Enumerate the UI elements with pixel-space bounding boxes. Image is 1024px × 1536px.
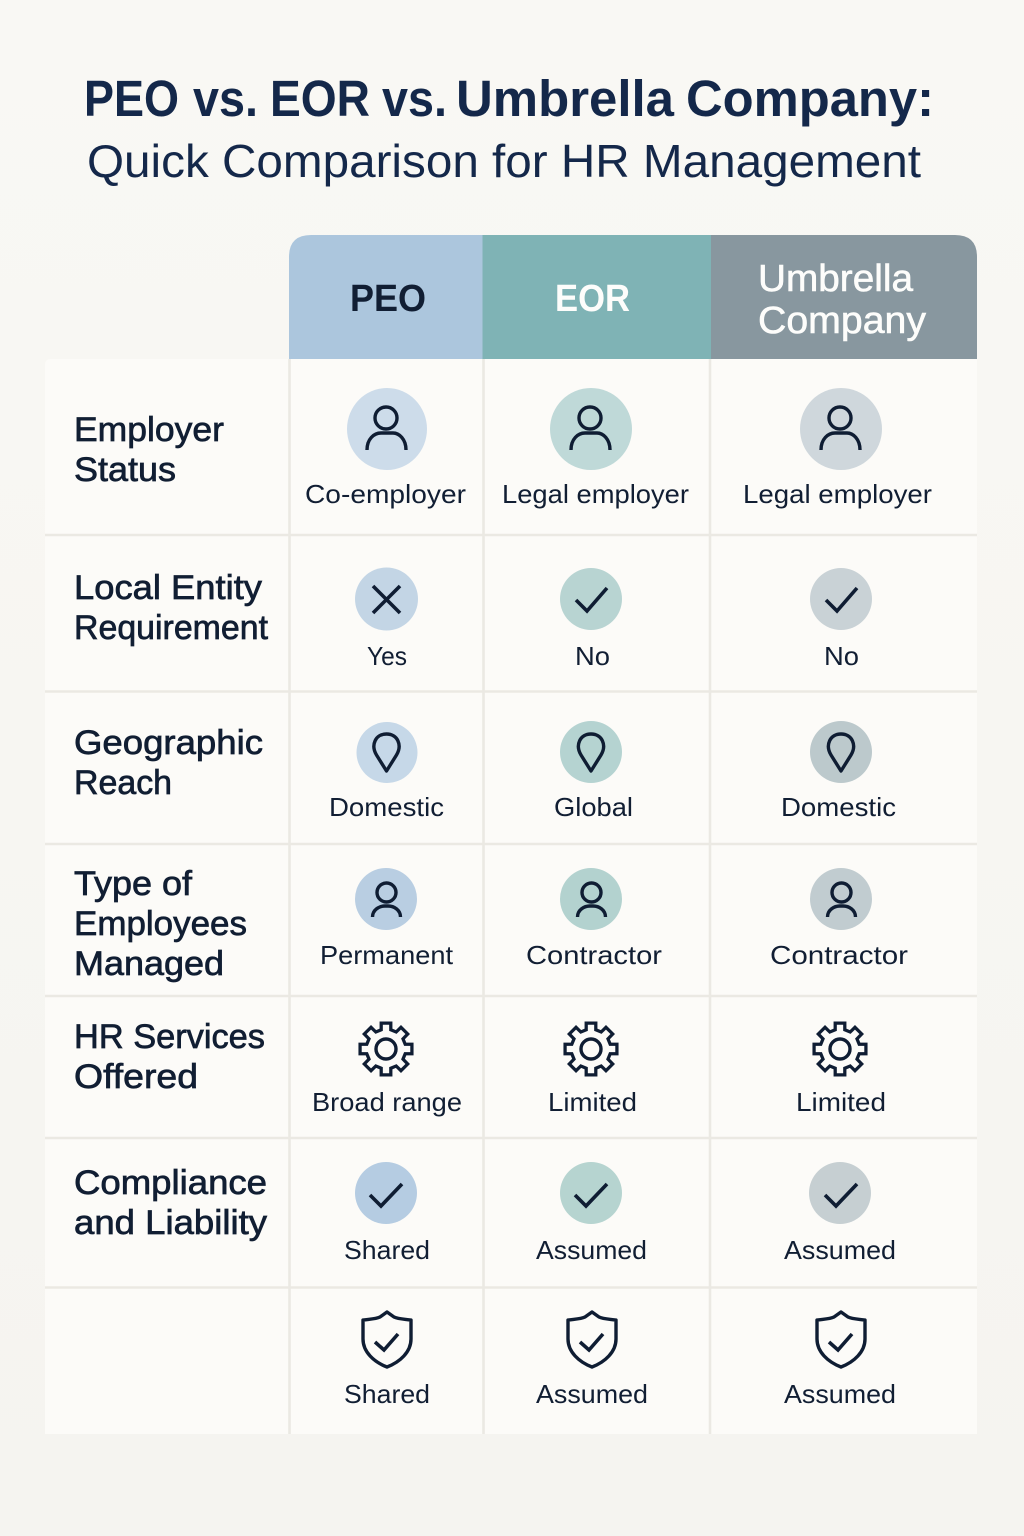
icon: shield Umbrella [817, 1312, 865, 1367]
value: Limited [796, 1087, 886, 1117]
value: Domestic [781, 792, 896, 822]
row label: Requirement [74, 609, 269, 647]
row: Compliance and Liability [74, 1162, 896, 1265]
value: Contractor [770, 940, 908, 970]
value: Legal employer [743, 479, 932, 509]
value: Permanent [320, 940, 454, 970]
row label: Compliance [74, 1164, 267, 1202]
value: Shared [344, 1235, 430, 1265]
value: Co-employer [305, 479, 466, 509]
value: Yes [367, 641, 407, 671]
title: Quick Comparison for HR Management [87, 135, 921, 187]
icon: pin EOR [560, 721, 622, 783]
row label: Status [74, 451, 176, 489]
icon: person Umbrella [810, 868, 872, 930]
row: HR Services Offered [74, 1018, 886, 1117]
icon: pin Umbrella [810, 721, 872, 783]
header: Umbrella Company: Umbrella [758, 258, 914, 300]
header: PEO: PEO [350, 278, 426, 320]
row label [74, 411, 224, 489]
value: Shared [344, 1379, 430, 1409]
header: PEO [289, 235, 482, 359]
icon: person EOR [550, 388, 632, 470]
icon: person PEO [355, 868, 417, 930]
value: No [575, 641, 610, 671]
title: PEO [84, 70, 179, 127]
icon: check Umbrella [809, 1162, 871, 1224]
icon: gear Umbrella [814, 1023, 866, 1075]
value: No [824, 641, 859, 671]
icon: person Umbrella [800, 388, 882, 470]
row label [74, 724, 263, 802]
row: Geographic Reach [74, 721, 896, 822]
row label [74, 865, 247, 983]
row label: HR Services [74, 1018, 265, 1056]
row label: Local Entity [74, 569, 262, 607]
row: Type of Employees Managed [74, 865, 908, 983]
icon: shield PEO [363, 1312, 411, 1367]
icon: check EOR [560, 1162, 622, 1224]
table grid [45, 359, 977, 1434]
header: EOR [482, 235, 711, 359]
value: Limited [548, 1087, 637, 1117]
icon: check EOR [560, 568, 622, 630]
row: shields [344, 1312, 896, 1409]
title: Umbrella [456, 70, 675, 127]
header: EOR: EOR [555, 278, 630, 320]
icon: person PEO [347, 388, 427, 470]
value: Domestic [329, 792, 444, 822]
value: Global [554, 792, 633, 822]
value: Assumed [536, 1379, 648, 1409]
row label: Offered [74, 1058, 198, 1096]
row: Local Entity Requirement [74, 568, 872, 671]
row label [74, 569, 269, 647]
header: Umbrella Company: Company [758, 300, 926, 342]
title: vs. [382, 70, 447, 127]
value: Assumed [536, 1235, 647, 1265]
row label: Employer [74, 411, 224, 449]
title: Company: [686, 70, 934, 127]
row: Employer Status [74, 388, 932, 509]
icon: gear PEO [360, 1023, 412, 1075]
row label [74, 1018, 265, 1096]
row label: and Liability [74, 1204, 267, 1242]
icon: check Umbrella [810, 568, 872, 630]
icon: cross PEO [355, 568, 418, 630]
title: vs. [193, 70, 258, 127]
row label: Managed [74, 945, 224, 983]
value: Assumed [784, 1379, 896, 1409]
icon: gear EOR [565, 1023, 617, 1075]
title: EOR [270, 70, 370, 127]
icon: shield EOR [568, 1312, 616, 1367]
value: Assumed [784, 1235, 896, 1265]
row label: Employees [74, 905, 247, 943]
table body panel [45, 359, 977, 1434]
value: Legal employer [502, 479, 689, 509]
table header [289, 235, 977, 359]
icon: person EOR [560, 868, 622, 930]
row label: Reach [74, 764, 172, 802]
value: Contractor [526, 940, 662, 970]
value: Broad range [312, 1087, 462, 1117]
row label: Type of [74, 865, 193, 903]
title [84, 70, 934, 187]
header: Umbrella Company [711, 235, 977, 359]
icon: pin PEO [356, 722, 418, 783]
row label: Geographic [74, 724, 263, 762]
row label [74, 1164, 267, 1242]
icon: check PEO [355, 1162, 417, 1224]
